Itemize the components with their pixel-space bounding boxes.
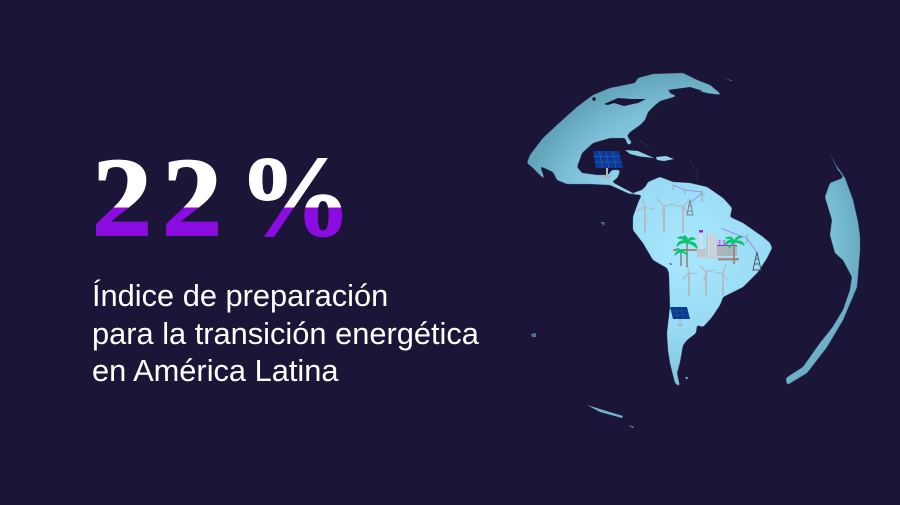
- big number: 22 %: 2: [92, 136, 152, 260]
- solar panel: argentina: [670, 307, 690, 325]
- solar panel: mexico: [593, 151, 623, 177]
- power plant: [673, 230, 739, 260]
- south america: [633, 177, 772, 387]
- wind turbines: north row: [637, 199, 691, 232]
- great lakes: [592, 87, 703, 265]
- north and central america: [527, 73, 860, 387]
- description text: [92, 278, 479, 388]
- big number: 22 %: 2: [162, 136, 222, 260]
- description text: para la transición energética: [92, 316, 479, 350]
- antarctic and small island fragments: [531, 222, 688, 428]
- palm trees: [675, 236, 744, 267]
- africa on the limb: [786, 152, 860, 385]
- big number: 22 %: %: [238, 133, 352, 260]
- description text: Índice de preparación: [92, 278, 388, 313]
- transmission towers and lines: [673, 185, 761, 270]
- faint island arcs: [637, 139, 698, 180]
- wind turbines: south row: [683, 265, 728, 295]
- caribbean islands: [625, 77, 845, 178]
- description text: en América Latina: [92, 353, 339, 388]
